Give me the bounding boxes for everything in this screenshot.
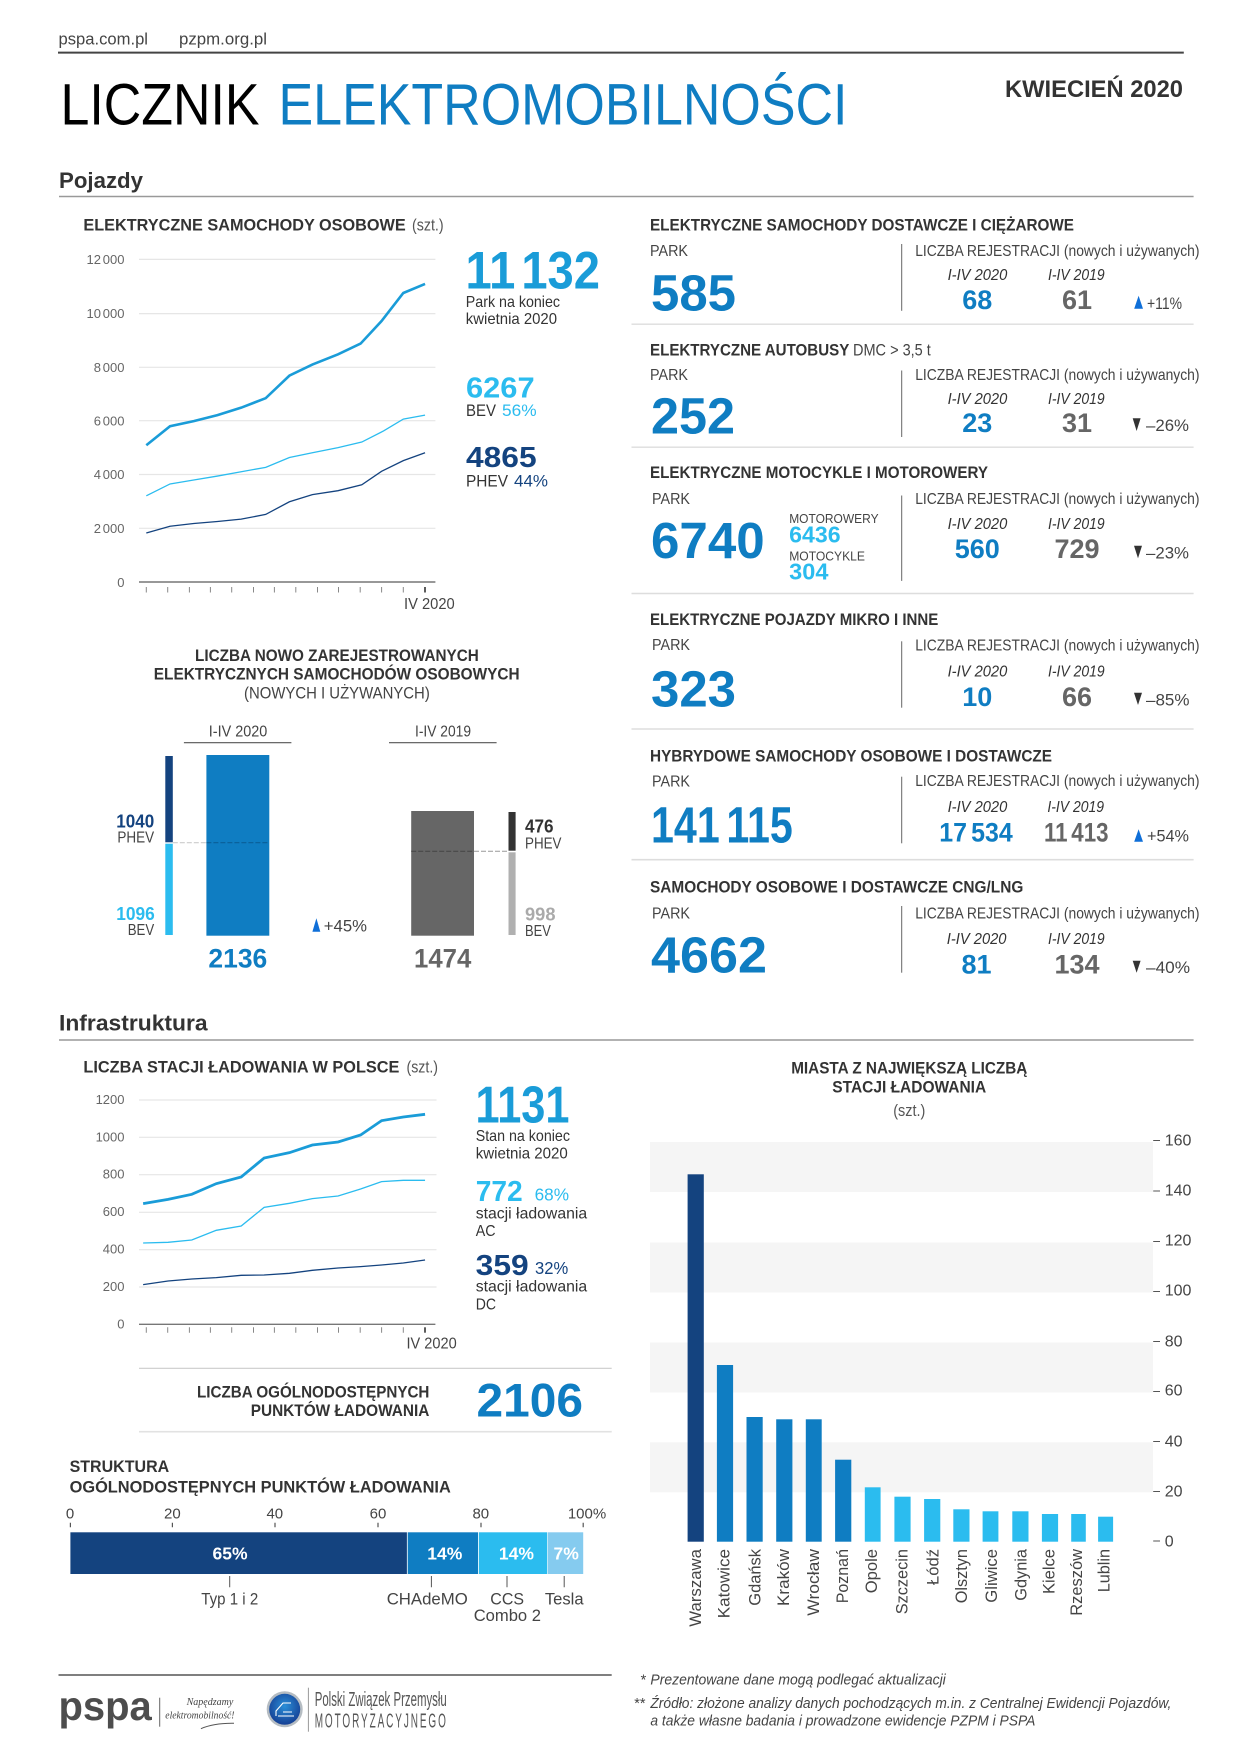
registrations: CNG/LNG: –40%: [1146, 958, 1190, 977]
registrations: vans and trucks: I-IV 2020: [948, 267, 1007, 284]
logo: PZPM: Polski Związek Przemysłu: [315, 1689, 447, 1711]
line chart: cars: 4 000: [94, 467, 124, 482]
registrations: micro vehicles: 66: [1062, 682, 1092, 712]
registrations: hybrids: I-IV 2019: [1047, 799, 1104, 816]
registrations: buses: I-IV 2020: [948, 391, 1007, 408]
panel: charging point structure: [66, 1457, 606, 1625]
bar group 2020: 1040: [116, 810, 154, 831]
key figures: stations: [476, 1077, 587, 1313]
bars title: ELEKTRYCZNYCH SAMOCHODÓW OSOBOWYCH: [154, 665, 520, 684]
line chart: stations: IV 2020: [406, 1336, 457, 1353]
key figures: stations: AC: [476, 1223, 496, 1240]
panel: motorcycles and mopeds: 6740: [651, 512, 765, 569]
registrations: hybrids: 11 413: [1044, 818, 1108, 848]
registrations: micro vehicles: LICZBA REJESTRACJI (nowych i używanych): [915, 638, 1200, 655]
bar group 2020: I-IV 2020: [209, 723, 267, 740]
bar group 2019: BEV: [525, 923, 551, 940]
footnotes: *: [640, 1672, 647, 1688]
registrations: buses: LICZBA REJESTRACJI (nowych i używanych): [915, 367, 1200, 384]
footnotes: [634, 1672, 1171, 1730]
bars title: LICZBA NOWO ZAREJESTROWANYCH: [195, 646, 479, 665]
key figures: cars: 44%: [514, 471, 548, 490]
panel: motorcycles and mopeds: 6436: [789, 522, 841, 548]
line chart: cars: 2 000: [94, 521, 124, 536]
percent axis: 60: [370, 1506, 386, 1523]
city labels: Opole: [862, 1549, 881, 1593]
logo: PZPM: [267, 1688, 448, 1732]
callout: public charging points: PUNKTÓW ŁADOWANIA: [251, 1401, 429, 1420]
percent axis: 40: [266, 1506, 283, 1523]
city labels: Kraków: [774, 1548, 793, 1606]
city labels: Łódź: [923, 1549, 942, 1585]
registrations: hybrids: LICZBA REJESTRACJI (nowych i używanych): [915, 773, 1200, 790]
stacked bar: 14%: [499, 1543, 534, 1563]
bar group 2019: I-IV 2019: [415, 723, 471, 740]
footnotes: **: [634, 1696, 646, 1712]
key figures: stations: Stan na koniec: [476, 1128, 570, 1145]
value axis: 40: [1165, 1434, 1183, 1450]
panel: motorcycles and mopeds: MOTOROWERY: [789, 511, 879, 526]
panel: new registrations bar comparison: [116, 646, 562, 973]
footer rule: [58, 1674, 612, 1676]
percent axis: 80: [472, 1506, 489, 1523]
registrations: CNG/LNG: LICZBA REJESTRACJI (nowych i używanych): [915, 906, 1200, 923]
key figures: cars: 6267: [466, 372, 535, 404]
stacked bar: [70, 1532, 583, 1574]
footnotes: Źródło: złożone analizy danych pochodzących m.in. z Centralnej Ewidencji Pojazdów,: [649, 1695, 1171, 1712]
key figures: cars: BEV: [466, 401, 497, 420]
bar legend labels: CCS: [490, 1590, 524, 1609]
value axis: 120: [1165, 1232, 1191, 1250]
callout: public charging points: LICZBA OGÓLNODOSTĘPNYCH: [197, 1382, 429, 1401]
structure title: STRUKTURA: [70, 1457, 169, 1476]
panel: CNG/LNG vehicles: SAMOCHODY OSOBOWE I DOSTAWCZE CNG/LNG: [650, 878, 1023, 897]
value axis: 60: [1165, 1382, 1183, 1400]
footnotes: a także własne badania i prowadzone ewidencje PZPM i PSPA: [650, 1714, 1035, 1730]
key figures: cars: Park na koniec: [466, 294, 560, 311]
structure title: [70, 1457, 451, 1496]
value axis: 80: [1165, 1334, 1183, 1350]
registrations: motorcycles: –23%: [1146, 543, 1189, 562]
registrations: hybrids: 17 534: [939, 818, 1013, 848]
line chart: cars: 12 000: [87, 252, 124, 267]
registrations: CNG/LNG: I-IV 2020: [947, 931, 1007, 948]
city labels: Poznań: [833, 1549, 852, 1603]
bar group 2020: 2136: [208, 943, 267, 973]
registrations: motorcycles: [902, 491, 1200, 581]
city labels: Gdańsk: [745, 1549, 764, 1606]
panel: micro vehicles: PARK: [652, 637, 690, 654]
panel: vans and trucks: PARK: [650, 243, 688, 260]
registrations: vans and trucks: [902, 243, 1200, 315]
registrations: motorcycles: 560: [955, 534, 1000, 564]
stacked bar: 7%: [554, 1543, 579, 1563]
registrations: CNG/LNG: 134: [1054, 949, 1100, 979]
bar group 2020: BEV: [128, 922, 154, 939]
logo: PZPM: MOTORYZACYJNEGO: [315, 1711, 448, 1732]
header links: pspa.com.pl: [58, 31, 148, 49]
panel: electric buses: PARK: [650, 367, 688, 384]
city labels: Katowice: [714, 1549, 734, 1618]
panel: CNG/LNG vehicles: PARK: [652, 906, 690, 923]
line chart: stations: 0: [117, 1316, 124, 1331]
line chart: stations: 800: [103, 1167, 124, 1182]
key figures: cars: 56%: [502, 401, 537, 420]
city labels: Wrocław: [804, 1548, 823, 1616]
key figures: stations: 68%: [535, 1184, 569, 1204]
logo: PSPA: [58, 1683, 235, 1729]
key figures: stations: 359: [476, 1250, 529, 1282]
bar legend labels: CHAdeMO: [387, 1590, 468, 1609]
panel: hybrid cars and vans: 141 115: [651, 796, 793, 853]
key figures: stations: 32%: [535, 1258, 568, 1278]
line chart: cars: IV 2020: [404, 596, 455, 613]
cities chart title: (szt.): [893, 1101, 925, 1120]
value axis: 140: [1165, 1182, 1191, 1200]
registrations: hybrids: I-IV 2020: [948, 799, 1007, 816]
callout: public charging points: [139, 1368, 612, 1432]
registrations: buses: 23: [962, 408, 992, 438]
heading: Infrastruktura: Infrastruktura: [59, 1011, 208, 1036]
bar group 2019: [389, 723, 562, 973]
date: KWIECIEŃ 2020: [1005, 75, 1183, 103]
bars: [688, 1174, 1113, 1542]
line chart: cars: 0: [117, 575, 124, 590]
percent axis: 100%: [568, 1506, 606, 1523]
bar group 2020: [116, 723, 291, 973]
panel: motorcycles and mopeds: MOTOCYKLE: [789, 548, 865, 563]
registrations: vans and trucks: +11%: [1147, 294, 1182, 313]
registrations: vans and trucks: I-IV 2019: [1048, 267, 1105, 284]
panel: micro vehicles: ELEKTRYCZNE POJAZDY MIKRO I INNE: [650, 610, 938, 629]
panel: cities bar chart: [650, 1058, 1191, 1627]
registrations: vans and trucks: LICZBA REJESTRACJI (nowych i używanych): [915, 243, 1200, 260]
registrations: CNG/LNG: I-IV 2019: [1048, 931, 1105, 948]
structure title: OGÓLNODOSTĘPNYCH PUNKTÓW ŁADOWANIA: [70, 1477, 451, 1496]
callout: public charging points: 2106: [476, 1374, 583, 1427]
registrations: micro vehicles: I-IV 2020: [948, 664, 1007, 681]
registrations: hybrids: +54%: [1147, 827, 1189, 846]
panel: electric buses: 252: [651, 388, 735, 445]
chart title: ELEKTRYCZNE SAMOCHODY OSOBOWE: [83, 216, 406, 234]
bar legend labels: Typ 1 i 2: [201, 1590, 258, 1609]
registrations: hybrids: [902, 773, 1200, 848]
bars title: [154, 646, 520, 702]
registrations: vans and trucks: 61: [1062, 285, 1092, 315]
key figures: stations: 772: [476, 1176, 523, 1208]
panel: CNG/LNG vehicles: [650, 878, 1200, 984]
bar group 2020: 1096: [116, 903, 155, 924]
registrations: motorcycles: I-IV 2019: [1048, 516, 1105, 533]
stations chart title: (szt.): [406, 1058, 438, 1077]
registrations: CNG/LNG: 81: [961, 949, 992, 979]
line chart: stations: 200: [103, 1279, 124, 1294]
line chart: cars: 8 000: [94, 360, 124, 375]
key figures: cars: PHEV: [466, 471, 509, 490]
key figures: stations: DC: [476, 1296, 496, 1313]
registrations: micro vehicles: [902, 638, 1200, 712]
stacked bar: 65%: [212, 1543, 248, 1563]
registrations: motorcycles: LICZBA REJESTRACJI (nowych i używanych): [915, 491, 1200, 508]
bar legend labels: Combo 2: [474, 1606, 541, 1625]
registrations: micro vehicles: I-IV 2019: [1048, 664, 1105, 681]
bar group 2020: PHEV: [117, 829, 154, 846]
key figures: cars: 4865: [466, 442, 537, 474]
bar legend labels: Tesla: [545, 1590, 584, 1609]
registrations: vans and trucks: 68: [962, 285, 992, 315]
bar group 2019: PHEV: [525, 835, 562, 852]
panel: CNG/LNG vehicles: 4662: [651, 926, 767, 984]
line chart: stations: 1200: [96, 1092, 124, 1107]
line chart: stations: 1000: [96, 1129, 124, 1144]
footnotes: Prezentowane dane mogą podlegać aktualizacji: [650, 1672, 947, 1688]
change indicator +45%: +45%: [324, 916, 367, 935]
heading: Pojazdy: Pojazdy: [59, 168, 144, 193]
bar group 2019: 998: [525, 904, 556, 925]
logo: PSPA: Napędzamy: [186, 1696, 233, 1708]
city labels: Olsztyn: [952, 1549, 971, 1603]
header links: [58, 31, 1184, 53]
header links: pzpm.org.pl: [179, 31, 267, 49]
registrations: micro vehicles: 10: [962, 682, 992, 712]
city labels: Kielce: [1040, 1549, 1059, 1594]
value axis: 160: [1165, 1132, 1191, 1150]
title: ELEKTROMOBILNOŚCI: [278, 72, 848, 138]
key figures: cars: kwietnia 2020: [466, 311, 557, 328]
bar group 2019: 476: [525, 816, 554, 837]
panel: hybrid cars and vans: PARK: [652, 774, 690, 790]
panel: micro vehicles: [632, 610, 1200, 729]
cities chart title: [791, 1058, 1027, 1120]
line chart: stations: 600: [103, 1204, 124, 1219]
key figures: cars: [466, 242, 600, 490]
background bands: [650, 1142, 1153, 1492]
logo: PSPA: elektromobilność!: [165, 1709, 235, 1721]
stacked bar: 14%: [427, 1543, 463, 1563]
line chart: stations: [96, 1092, 457, 1353]
panel: electric passenger cars line chart: [83, 216, 600, 613]
panel: micro vehicles: 323: [651, 660, 736, 717]
city labels: Gliwice: [982, 1549, 1001, 1603]
bars title: (NOWYCH I UŻYWANYCH): [244, 683, 430, 702]
line chart: stations: 400: [103, 1242, 124, 1256]
line chart: cars: 10 000: [87, 306, 124, 321]
line chart: cars: [87, 252, 455, 613]
panel: charging stations line chart: [83, 1058, 587, 1353]
value axis: [1153, 1132, 1191, 1550]
panel: motorcycles and mopeds: [632, 463, 1200, 594]
line chart: cars: 6 000: [94, 414, 124, 428]
title: LICZNIK: [60, 72, 260, 138]
panel: motorcycles and mopeds: ELEKTRYCZNE MOTOCYKLE I MOTOROWERY: [650, 463, 989, 482]
city labels: Rzeszów: [1067, 1548, 1086, 1616]
panel: electric buses: DMC > 3,5 t: [853, 340, 931, 360]
title: [60, 72, 848, 138]
stations chart title: LICZBA STACJI ŁADOWANIA W POLSCE: [83, 1058, 399, 1077]
registrations: buses: 31: [1062, 408, 1092, 438]
key figures: stations: 1131: [476, 1077, 570, 1135]
registrations: motorcycles: I-IV 2020: [948, 516, 1007, 533]
key figures: stations: kwietnia 2020: [476, 1146, 568, 1163]
percent axis: 20: [164, 1506, 181, 1523]
registrations: motorcycles: 729: [1054, 534, 1100, 564]
city labels: Szczecin: [892, 1549, 912, 1614]
registrations: buses: [902, 367, 1200, 438]
percent axis: [66, 1506, 606, 1527]
value axis: 100: [1165, 1282, 1191, 1300]
registrations: micro vehicles: –85%: [1146, 690, 1190, 709]
cities chart title: STACJI ŁADOWANIA: [832, 1077, 986, 1096]
panel: electric buses: ELEKTRYCZNE AUTOBUSY: [650, 340, 850, 360]
key figures: stations: stacji ładowania: [476, 1279, 587, 1296]
chart title: (szt.): [412, 216, 444, 234]
bar group 2019: 1474: [414, 943, 471, 973]
panel: vans and trucks: 585: [651, 265, 736, 322]
panel: vans and trucks: [632, 216, 1200, 324]
cities chart title: MIASTA Z NAJWIĘKSZĄ LICZBĄ: [791, 1058, 1027, 1077]
percent axis: 0: [66, 1506, 74, 1523]
bar legend labels: [201, 1576, 584, 1625]
panel: hybrid cars and vans: [632, 746, 1200, 860]
logo: PSPA: pspa: [58, 1683, 153, 1729]
value axis: 20: [1165, 1484, 1183, 1500]
panel: motorcycles and mopeds: 304: [789, 558, 829, 584]
key figures: stations: stacji ładowania: [476, 1205, 587, 1222]
registrations: buses: –26%: [1146, 416, 1189, 435]
key figures: cars: 11 132: [466, 242, 600, 301]
panel: electric buses: [632, 340, 1200, 447]
city labels: Warszawa: [686, 1548, 705, 1627]
registrations: CNG/LNG: [902, 906, 1200, 979]
city labels: Lublin: [1094, 1549, 1114, 1592]
panel: motorcycles and mopeds: PARK: [652, 491, 690, 508]
value axis: 0: [1165, 1534, 1174, 1550]
registrations: buses: I-IV 2019: [1048, 391, 1105, 408]
city labels: [686, 1548, 1114, 1627]
city labels: Gdynia: [1012, 1548, 1030, 1601]
panel: hybrid cars and vans: HYBRYDOWE SAMOCHODY OSOBOWE I DOSTAWCZE: [650, 746, 1052, 765]
panel: vans and trucks: ELEKTRYCZNE SAMOCHODY DOSTAWCZE I CIĘŻAROWE: [650, 216, 1074, 234]
